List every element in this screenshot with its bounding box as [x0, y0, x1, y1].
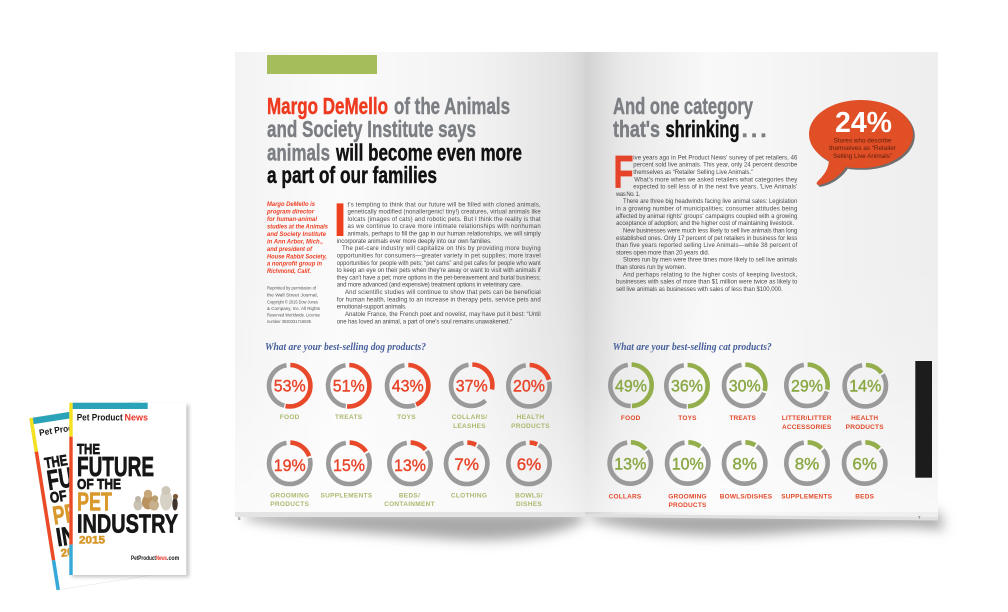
headline: left page: a part of our families — [267, 162, 437, 188]
front cover spine: red — [69, 437, 73, 545]
page lower sheen — [235, 250, 938, 512]
ring: food 53% — [269, 365, 310, 421]
body text: right page — [615, 155, 798, 293]
masthead: Pet Product — [77, 413, 123, 424]
sidebar: author bio: House Rabbit Society, — [267, 253, 327, 260]
body text: right page: expected to sell less of in the next five years, 'Live Animals' — [633, 185, 797, 191]
ring: toys 43%: TOYS — [397, 414, 416, 421]
website: .com — [167, 556, 179, 562]
body text: right page: acceptance of adoption; and the higher cost of maintaining livestock. — [616, 221, 794, 227]
body text: left page: And scientific studies will continue to show that pets can be beneficial — [345, 290, 541, 296]
back cover title: INDUSTRY — [54, 507, 158, 552]
ring: food 53%: 53% — [274, 376, 306, 396]
sidebar: reprint credit — [267, 286, 321, 324]
body text: left page: and more advanced (and expensive) treatment options in veterinary care. — [337, 283, 522, 289]
headline: left page: Margo DeMello — [267, 93, 388, 119]
sidebar: author bio: and Society Institute — [267, 231, 326, 238]
ring: beds/containment 13% — [384, 443, 435, 508]
sidebar: reprint credit: & Company, Inc. All Rights — [267, 306, 321, 311]
ring: litter/litter accessories 29%: ACCESSORIES — [782, 424, 832, 431]
booklet: back copy — [29, 400, 172, 590]
panel: right page — [585, 52, 938, 520]
ring: health products 20%: PRODUCTS — [511, 423, 550, 430]
green header block — [267, 55, 377, 74]
cover title: 2015 — [79, 534, 105, 546]
ring: bowls/dishes 8%: BOWLS/DISHES — [720, 494, 773, 501]
sidebar: reprint credit: Reserved Worldwide. License — [267, 312, 320, 318]
booklet: front copy — [69, 403, 186, 575]
ring: beds 6% — [844, 442, 885, 501]
callout figure: 24% — [835, 107, 892, 139]
headline: right page: ... — [742, 116, 770, 142]
headline: left page: animals — [267, 140, 330, 166]
body text: right page: businesses with sales of more than $1 million were twice as likely to — [616, 280, 798, 286]
body text: left page: t's tempting to think that our future will be filled with cloned animals, — [348, 202, 541, 208]
ring: supplements 15%: SUPPLEMENTS — [320, 492, 373, 500]
sidebar: author bio: for human-animal — [267, 216, 317, 223]
body text: right page: What's more when we asked retailers what categories they — [634, 177, 797, 183]
drop cap I: I — [334, 193, 347, 246]
back cover title: FUTURE — [45, 453, 126, 496]
front cover top bar — [73, 403, 148, 409]
ring: toys 36% — [666, 365, 708, 422]
front cover spine: yellow — [69, 403, 73, 437]
booklet shadow — [72, 405, 189, 577]
ring: health products 14%: HEALTH — [851, 415, 878, 422]
body text: right page: sell live animals as businesses with sales of less than $100,000. — [616, 287, 783, 293]
ring: beds 6%: BEDS — [855, 494, 875, 501]
ring: grooming products 10%: PRODUCTS — [668, 502, 707, 509]
ring: clothing 7% — [446, 443, 487, 500]
body text: right page: themselves as “Retailer Selling Live Animals.” — [633, 170, 753, 176]
ring: litter/litter accessories 29%: 29% — [791, 376, 823, 396]
sidebar: author bio: in Ann Arbor, Mich., — [267, 238, 323, 245]
icon: group of pets — [134, 486, 178, 510]
headline: left page: and Society Institute says — [267, 116, 476, 142]
cover title — [77, 441, 178, 546]
body text: right page: was No. 1. — [615, 192, 640, 198]
sidebar: author bio: and president of — [267, 246, 313, 253]
headline: right page — [613, 93, 770, 142]
body text: right page: established ones. Only 17 percent of pet retailers in business for less — [616, 236, 797, 242]
headline: right page: that's — [613, 116, 660, 142]
body text: left page: to keep an eye on their pets when they're away or want to visit with animals if — [337, 268, 541, 274]
back cover title: PET — [50, 496, 90, 531]
headline: left page: will become even more — [335, 140, 522, 166]
bubble body — [809, 100, 913, 185]
callout caption: themselves as “Retailer — [829, 145, 897, 152]
ring: collars 13%: 13% — [614, 454, 646, 474]
back cover title: 2015 — [60, 544, 88, 560]
ring: bowls/dishes 6% — [508, 443, 550, 508]
website: News — [156, 556, 167, 562]
cover title: FUTURE — [77, 451, 154, 482]
ring: collars/leashes 37%: COLLARS/ — [452, 414, 487, 421]
ring: toys 36%: 36% — [671, 376, 703, 396]
sidebar: author bio: a nonprofit group in — [267, 261, 322, 268]
body text: right page: than five years reported selling Live Animals—while 38 percent of — [616, 243, 798, 249]
masthead: News — [124, 413, 148, 424]
body text: left page: incorporate animals ever more deeply into our own families. — [337, 239, 492, 245]
chart heading: dog products: What are your best-selling dog products? — [265, 342, 426, 353]
chart: best-selling dog products — [269, 365, 550, 508]
ring: beds/containment 13%: CONTAINMENT — [384, 501, 435, 508]
ring: grooming products 10%: GROOMING — [668, 494, 707, 501]
body text: right page: stores open more than 20 years did. — [616, 250, 710, 256]
back cover sheet — [29, 400, 172, 590]
body text: left page — [337, 202, 541, 325]
back cover title: OF THE — [49, 483, 95, 507]
ring: collars/leashes 37%: 37% — [456, 376, 488, 396]
headline: right page: shrinking — [666, 116, 740, 142]
ring: treats 51% — [328, 365, 369, 421]
ring: litter/litter accessories 29%: LITTER/LITTER — [782, 415, 832, 422]
body text: right page: in a growing number of municipalities; consumer attitudes being — [616, 206, 797, 212]
ring: supplements 15%: 15% — [333, 456, 365, 475]
website: PetProduct — [131, 556, 156, 562]
body text: right page: than stores run by women. — [616, 265, 686, 271]
ring: toys 43%: 43% — [392, 376, 424, 396]
body text: left page: emotional-support animals. — [337, 305, 407, 311]
ring: treats 30%: 30% — [729, 376, 761, 396]
back cover title: THE — [43, 452, 69, 472]
cover title: INDUSTRY — [77, 509, 178, 539]
left page bottom edge — [235, 512, 585, 517]
ring: collars 13% — [609, 442, 651, 501]
cover title: OF THE — [77, 476, 121, 493]
chart: best-selling cat products — [609, 365, 886, 509]
ring: collars/leashes 37% — [451, 365, 492, 430]
back cover color spine — [29, 406, 134, 590]
ring: health products 20% — [508, 365, 550, 430]
callout caption: Selling Live Animals” — [833, 153, 892, 160]
sidebar: author bio: program director — [266, 208, 314, 216]
chart heading: cat products: What are your best-selling cat products? — [613, 342, 772, 353]
ring: supplements 8%: 8% — [795, 454, 819, 474]
sidebar: reprint credit: Reprinted by permission of — [267, 286, 317, 290]
callout: 24% speech bubble — [809, 100, 915, 187]
body text: right page: There are three big headwinds facing live animal sales: Legislation — [623, 199, 797, 205]
body text: left page: animals, perhaps to fill the gap in our human relationships, we will simply — [348, 232, 541, 238]
website — [131, 556, 179, 562]
ring: beds 6%: 6% — [852, 454, 877, 474]
body text: right page: And perhaps relating to the higher costs of keeping livestock, — [623, 272, 798, 278]
ring: bowls/dishes 6%: BOWLS/ — [515, 492, 543, 500]
body text: left page: as we continue to crave more intimate relationships with nonhuman — [348, 224, 541, 230]
ring: collars/leashes 37%: LEASHES — [453, 423, 486, 430]
ring: bowls/dishes 8% — [720, 442, 773, 501]
magazine spread — [235, 52, 938, 520]
ring: beds/containment 13%: 13% — [394, 456, 426, 475]
headline: left page: of the Animals — [394, 93, 510, 119]
ring: bowls/dishes 6%: DISHES — [516, 501, 542, 508]
ring: health products 20%: HEALTH — [517, 414, 544, 421]
sidebar: reprint credit: number 3630331716835 — [267, 319, 311, 324]
body text: left page: one has loved an animal, a part of one's soul remains unawakened.” — [337, 319, 512, 325]
body text: left page: genetically modified (nonallergenic! tiny!) creatures, virtual animals like — [348, 210, 541, 216]
body text: left page: Anatole France, the French poet and novelist, may have put it best: “Until — [345, 312, 541, 318]
front cover sheet — [69, 403, 186, 575]
ring: beds/containment 13%: BEDS/ — [399, 492, 420, 500]
back cover title: Pet Product News — [38, 417, 110, 438]
ring: toys 36%: TOYS — [678, 415, 697, 422]
ring: health products 14%: 14% — [849, 376, 881, 396]
front cover spine: blue — [69, 545, 73, 575]
black tab — [915, 361, 932, 478]
ring: food 49%: 49% — [615, 376, 647, 396]
right page bottom edge — [585, 514, 938, 520]
ring: food 49%: FOOD — [621, 415, 641, 422]
cover title: PET — [77, 487, 112, 517]
ring: health products 14% — [845, 365, 886, 431]
body text: left page: opportunities for people with pets; “pet cams” and pet cafes for people who want — [337, 261, 541, 267]
callout caption — [829, 138, 897, 160]
ring: bowls/dishes 6%: 6% — [517, 455, 541, 474]
ring: grooming products 10%: 10% — [672, 454, 704, 474]
ring: supplements 8% — [781, 442, 833, 501]
sidebar: reprint credit: the Wall Street Journal, — [267, 293, 318, 298]
body text: right page: percent sold live animals. This year, only 24 percent describe — [633, 163, 798, 169]
right page number: 7 — [918, 515, 921, 520]
ring: treats 30%: TREATS — [729, 415, 757, 422]
ring: treats 30% — [724, 365, 765, 422]
ring: treats 51%: TREATS — [335, 414, 363, 421]
ring: litter/litter accessories 29% — [782, 365, 832, 431]
body text: right page: ive years ago in Pet Product News' survey of pet retailers, 46 — [633, 155, 798, 161]
sidebar: author bio: studies at the Animals — [267, 224, 328, 231]
headline: right page: And one category — [613, 93, 753, 119]
ring: health products 20%: 20% — [513, 376, 545, 396]
sidebar: author bio — [266, 201, 328, 275]
body text: right page: Stores run by men were three times more likely to sell live animals — [623, 258, 797, 264]
back cover title — [38, 412, 160, 560]
body text: left page: for human health, leading to an increase in therapy pets, service pets and — [337, 297, 541, 303]
drop cap F: F — [614, 146, 634, 197]
left page number: 6 — [238, 516, 241, 521]
ring: grooming products 19% — [269, 443, 310, 508]
cover title: THE — [77, 441, 100, 458]
ring: clothing 7%: 7% — [454, 455, 479, 474]
sidebar: reprint credit: Copyright © 2015 Dow Jones — [267, 298, 319, 304]
sidebar: author bio: Margo DeMello is — [267, 201, 315, 208]
sidebar: author bio: Richmond, Calif. — [267, 268, 311, 275]
body text: left page: lolcats (images of cats) and robotic pets. But I think the reality is that — [348, 217, 541, 223]
body text: right page: affected by animal rights' groups' campaigns coupled with a growing — [616, 214, 797, 220]
ring: clothing 7%: CLOTHING — [451, 492, 487, 500]
body text: left page: they can't have a pet; more options in the pet-bereavement and burial business; — [337, 275, 541, 281]
ring: grooming products 19%: GROOMING — [270, 492, 309, 500]
ring: grooming products 10% — [667, 442, 708, 509]
ring: supplements 15% — [320, 443, 373, 500]
magazine shadow — [245, 512, 944, 540]
bubble shadow — [811, 102, 915, 187]
ring: toys 43% — [387, 365, 428, 421]
body text: left page: The pet-care industry will capitalize on this by providing more buying — [342, 246, 541, 252]
body text: left page: opportunities for consumers—greater variety in pet supplies; more travel — [337, 254, 541, 260]
ring: food 53%: FOOD — [280, 414, 300, 421]
body text: right page: New businesses were much less likely to sell live animals than long — [623, 228, 797, 234]
ring: grooming products 19%: PRODUCTS — [270, 501, 310, 508]
ring: treats 51%: 51% — [333, 376, 365, 396]
ring: bowls/dishes 8%: 8% — [732, 454, 757, 474]
headline: left page — [267, 93, 522, 188]
ring: supplements 8%: SUPPLEMENTS — [781, 494, 833, 501]
callout caption: Stores who describe — [834, 138, 892, 144]
panel: left page — [235, 52, 585, 517]
ring: collars 13%: COLLARS — [609, 494, 642, 501]
ring: food 49% — [610, 365, 652, 422]
ring: health products 14%: PRODUCTS — [846, 424, 884, 431]
ring: grooming products 19%: 19% — [274, 456, 306, 475]
